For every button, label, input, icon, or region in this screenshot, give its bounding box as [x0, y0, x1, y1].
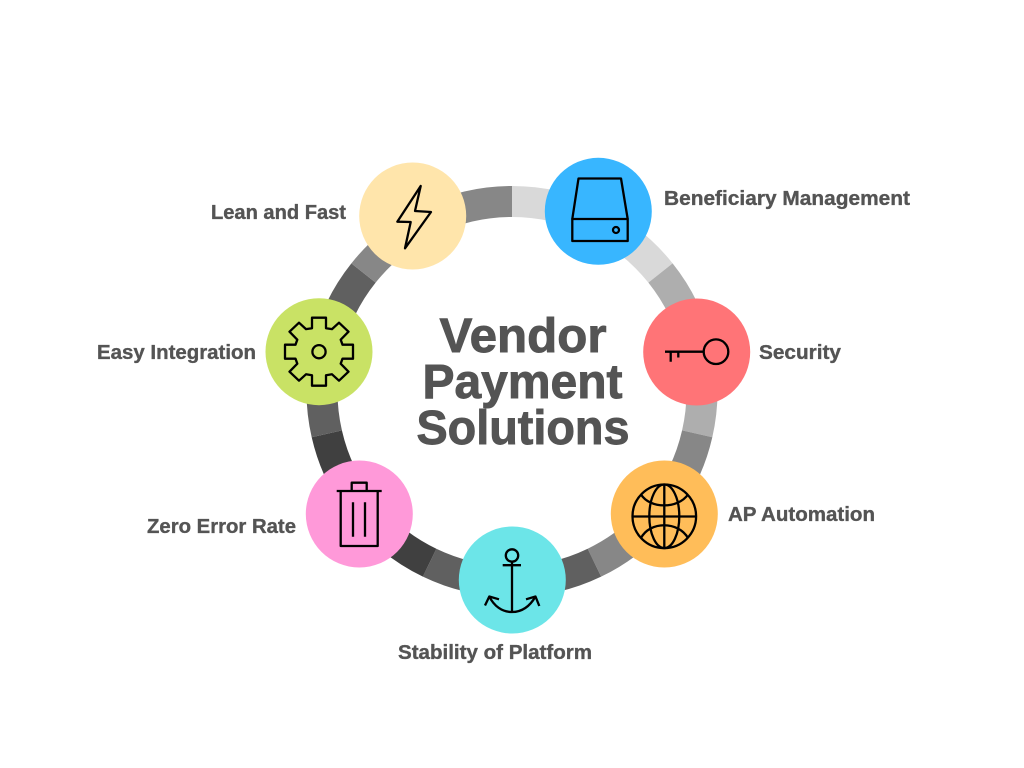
- label: Lean and Fast: Lean and Fast: [211, 202, 346, 224]
- item: Easy Integration: [266, 298, 372, 405]
- title: Solutions: [416, 402, 630, 455]
- label: Stability of Platform: Stability of Platform: [398, 642, 592, 664]
- icon: lightning bolt: [397, 186, 431, 248]
- icon: globe: [632, 484, 696, 548]
- title: Vendor: [440, 310, 606, 363]
- label: Zero Error Rate: Zero Error Rate: [147, 516, 296, 538]
- item: AP Automation: [611, 460, 718, 568]
- item: Beneficiary Management: [545, 158, 652, 265]
- label: Beneficiary Management: Beneficiary Management: [664, 188, 910, 210]
- icon: key: [665, 339, 728, 364]
- icon: trash can: [337, 483, 382, 546]
- title: Payment: [422, 356, 623, 409]
- icon: gear: [285, 318, 353, 386]
- segmented ring: [322, 202, 702, 581]
- item: Security: [643, 298, 750, 406]
- icon: anchor: [485, 549, 539, 612]
- label: Easy Integration: Easy Integration: [97, 342, 256, 364]
- label: Security: Security: [759, 342, 842, 364]
- item: Lean and Fast: [359, 162, 466, 270]
- item: Zero Error Rate: [306, 460, 413, 568]
- icon: hard drive: [572, 178, 628, 241]
- label: AP Automation: AP Automation: [728, 504, 875, 526]
- title: [416, 310, 630, 455]
- item: Stability of Platform: [459, 526, 566, 634]
